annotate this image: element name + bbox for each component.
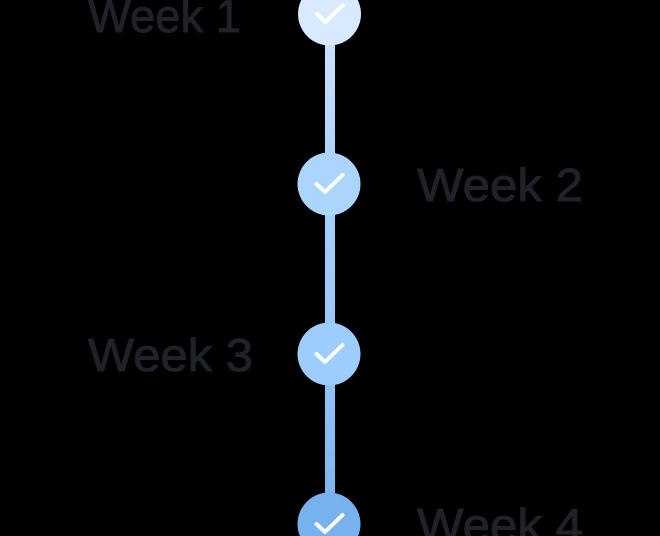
- label: week 3: Week 3: [88, 329, 253, 381]
- milestone: week 2: [298, 152, 360, 216]
- milestone: week 1: [298, 0, 361, 46]
- milestone: week 3: [298, 322, 360, 386]
- milestone: week 4: [298, 492, 360, 536]
- label: week 2: Week 2: [417, 159, 583, 211]
- timeline connector line: [325, 14, 335, 524]
